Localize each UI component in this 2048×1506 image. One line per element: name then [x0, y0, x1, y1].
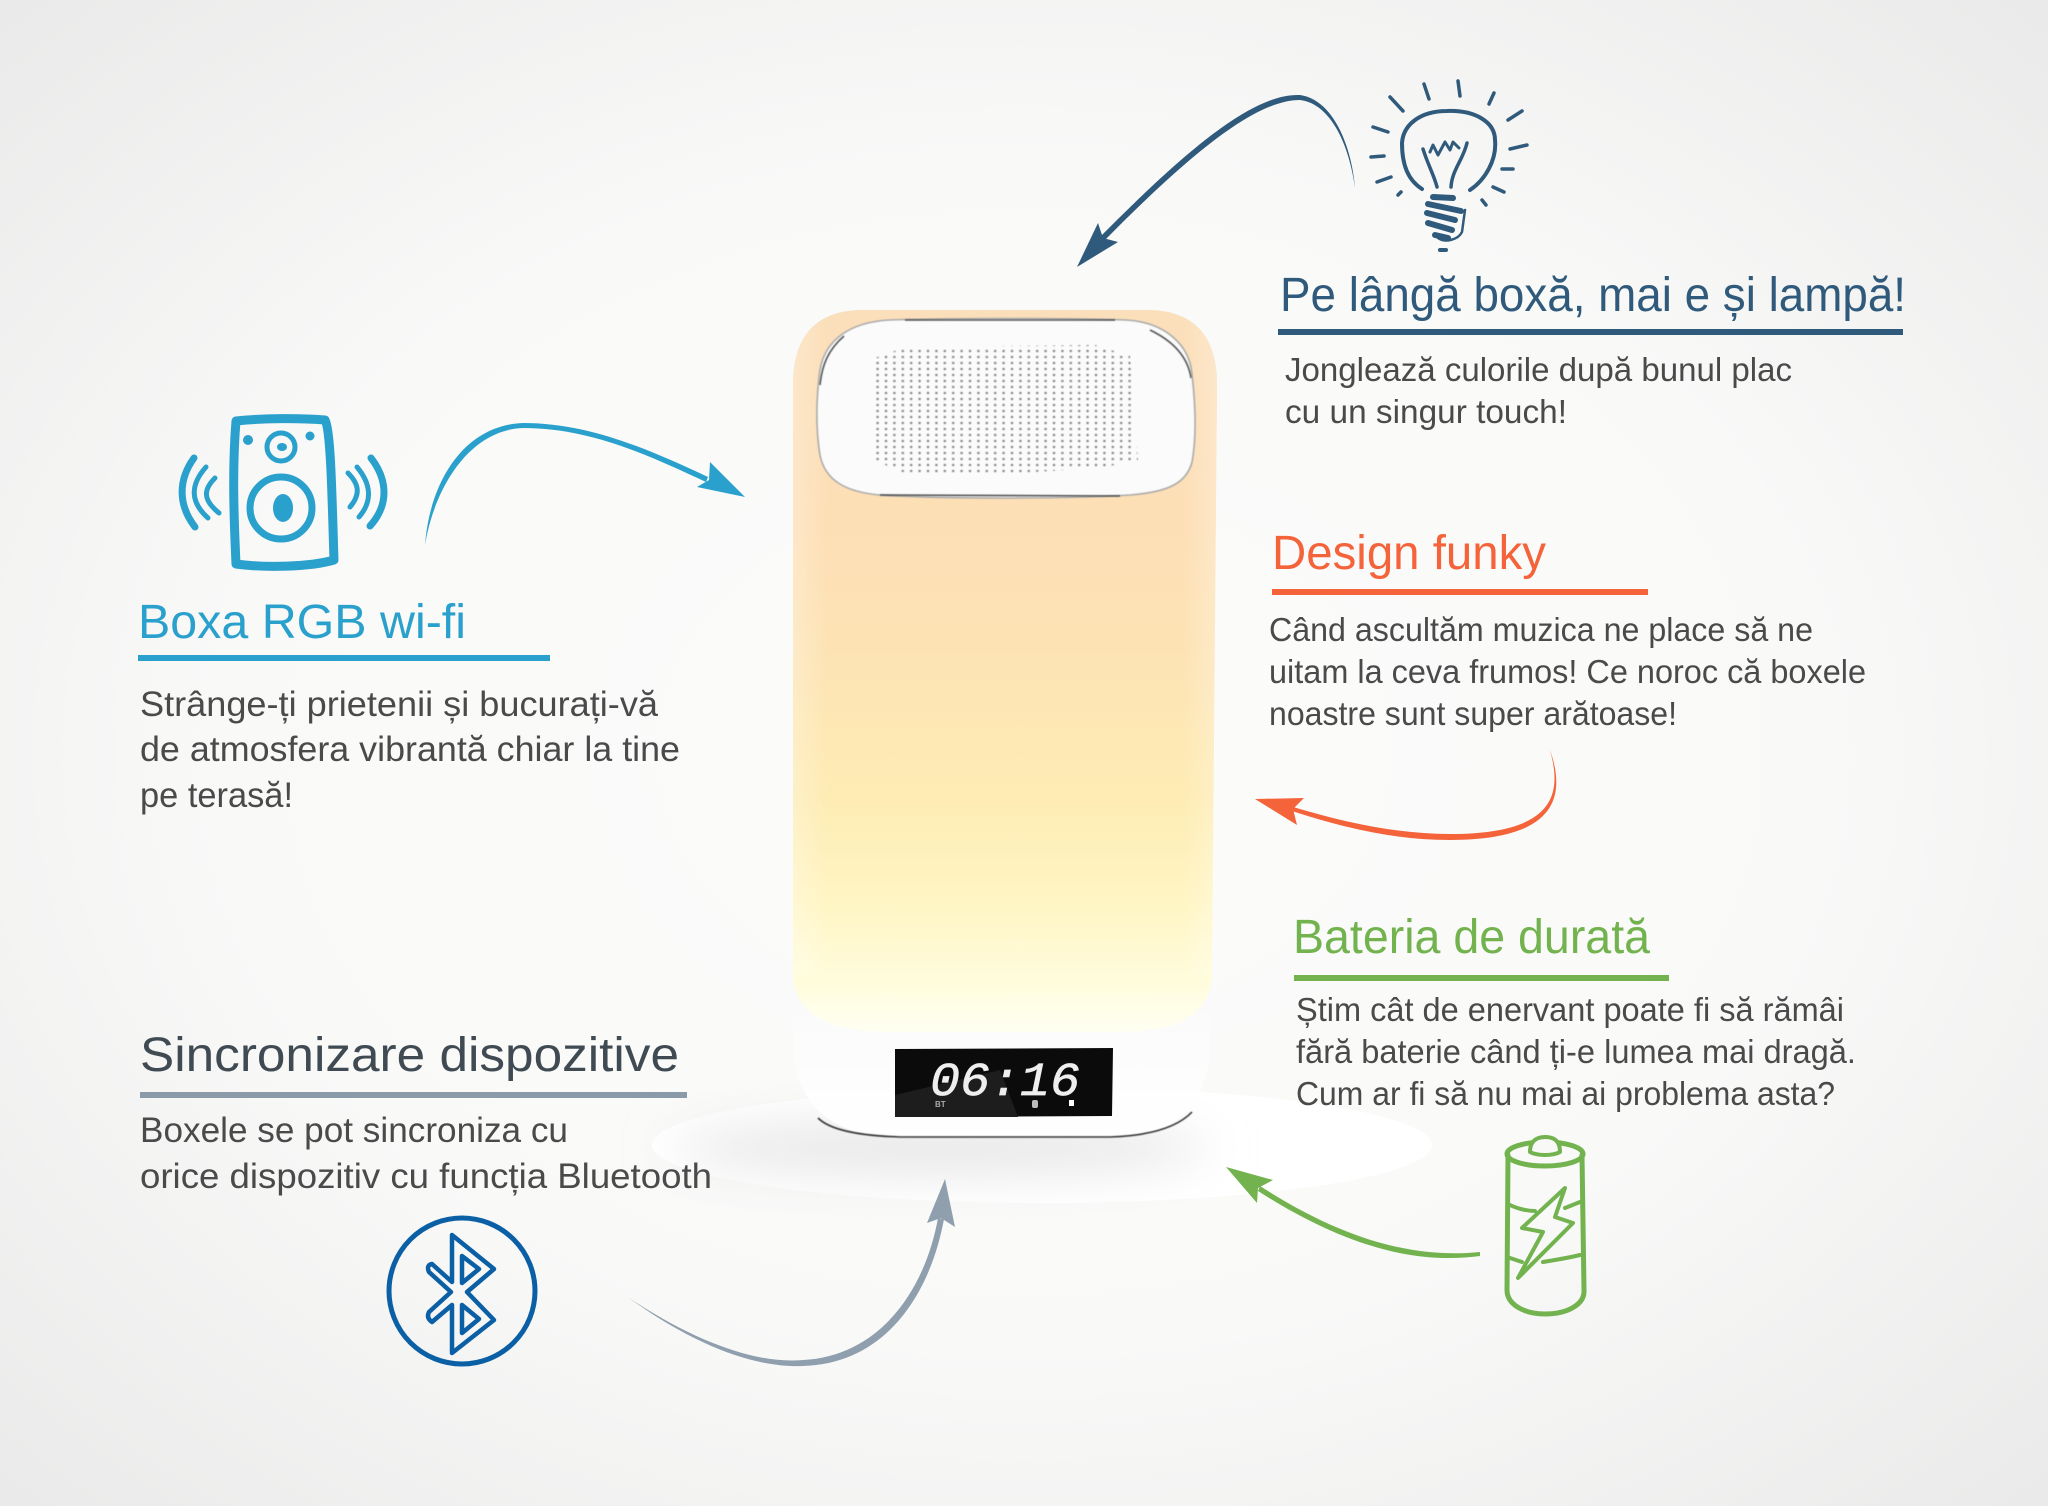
panel: sync: [140, 1029, 712, 1196]
arrow: lamp: [1077, 95, 1355, 267]
icon: battery: [1507, 1137, 1584, 1314]
heading: Sincronizare dispozitive: [140, 1029, 679, 1082]
body text: de atmosfera vibrantă chiar la tine: [140, 730, 680, 769]
body text: cu un singur touch!: [1285, 393, 1567, 430]
body text: [1296, 991, 1856, 1112]
icon: speaker: [182, 419, 384, 566]
body text: fără baterie când ți-e lumea mai dragă.: [1296, 1033, 1856, 1070]
body text: [1269, 611, 1866, 732]
panel: rgb speaker: [138, 596, 680, 815]
arrow: bluetooth: [629, 1179, 955, 1366]
speaker top plate: [817, 318, 1195, 498]
body text: Cum ar fi să nu mai ai problema asta?: [1296, 1075, 1835, 1112]
clock status marks: [1032, 1100, 1074, 1108]
arrow: speaker: [425, 423, 745, 545]
body text: Boxele se pot sincroniza cu: [140, 1111, 568, 1150]
heading: Bateria de durată: [1293, 911, 1650, 964]
heading underline: [1272, 589, 1648, 595]
panel: lamp feature: [1278, 269, 1906, 430]
body text: [1285, 351, 1792, 430]
body text: Strânge-ți prietenii și bucurați-vă: [140, 685, 659, 724]
body text: uitam la ceva frumos! Ce noroc că boxele: [1269, 653, 1866, 690]
arrow: battery: [1226, 1167, 1480, 1258]
body text: noastre sunt super arătoase!: [1269, 695, 1677, 732]
body text: [140, 1111, 712, 1196]
body text: [140, 685, 680, 815]
lamp white base: [793, 310, 1217, 1138]
lamp base bottom edge: [818, 1112, 1192, 1137]
speaker plate dark rim: [820, 320, 1191, 496]
body text: Când ascultăm muzica ne place să ne: [1269, 611, 1813, 648]
heading: Pe lângă boxă, mai e și lampă!: [1280, 269, 1906, 322]
icon: light bulb: [1371, 81, 1527, 250]
body text: Jonglează culorile după bunul plac: [1285, 351, 1792, 388]
body text: pe terasă!: [140, 776, 293, 815]
arrow: design: [1255, 750, 1556, 840]
panel: battery: [1293, 911, 1856, 1112]
clock BT indicator: BT: [935, 1100, 946, 1109]
clock display: [895, 1048, 1113, 1117]
lamp body edge light: [793, 310, 1217, 975]
body text: orice dispozitiv cu funcția Bluetooth: [140, 1157, 712, 1196]
heading underline: [1294, 975, 1669, 981]
floor ellipse under lamp: [652, 1087, 1432, 1203]
heading: Boxa RGB wi-fi: [138, 596, 466, 649]
lamp product: [793, 310, 1217, 1138]
body text: Știm cât de enervant poate fi să rămâi: [1296, 991, 1844, 1028]
speaker grille dots: [875, 345, 1138, 474]
heading underline: [1278, 329, 1903, 335]
heading underline: [140, 1092, 687, 1098]
panel: design: [1269, 527, 1866, 732]
heading underline: [138, 655, 550, 661]
clock time: 06:16: [930, 1057, 1080, 1110]
lamp glowing body: [793, 310, 1217, 1032]
heading: Design funky: [1272, 527, 1546, 580]
icon: bluetooth: [389, 1218, 535, 1364]
